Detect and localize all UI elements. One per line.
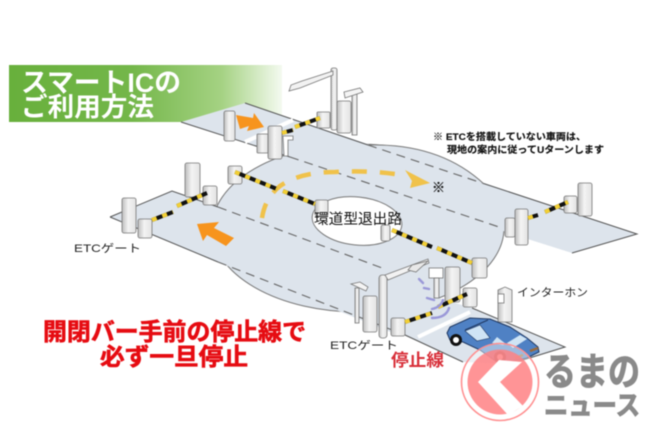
gate: upper lamp and sign [289, 68, 363, 135]
note: ETC not installed: ※ ETCを搭載していない車両は、 [433, 131, 586, 143]
label: ETC gate left: ETCゲート [74, 242, 141, 255]
gate: lower with lamp [351, 259, 477, 338]
main red message [43, 319, 306, 371]
note mark: ※ [432, 180, 445, 195]
icon: radio waves [419, 279, 449, 318]
label: ETC gate lower: ETCゲート [330, 339, 398, 352]
note: ETC not installed [433, 131, 604, 156]
label: loop exit road: 環道型退出路 [314, 211, 403, 228]
title banner: ご利用方法 [21, 92, 154, 122]
central island [310, 192, 404, 250]
logo: watermark [462, 344, 640, 421]
gate: left lower [122, 163, 217, 238]
arrow: upper lane orange [236, 113, 264, 131]
main red message: 必ず一旦停止 [100, 344, 248, 371]
stop line [418, 312, 470, 337]
main red message: 開閉バー手前の停止線で [43, 319, 306, 346]
note: ETC not installed: 現地の案内に従ってUターンします [447, 144, 604, 156]
icon: blue car [447, 318, 539, 363]
title banner: スマートICの [21, 68, 181, 98]
road surface: roundabout and lanes [110, 103, 637, 364]
gate: upper left [224, 111, 330, 159]
title banner [9, 65, 282, 122]
arrow: yellow dashed route [262, 170, 430, 218]
label: intercom: インターホン [517, 286, 588, 299]
arrow: lower lane orange [197, 222, 234, 246]
logo: watermark: ニュース [544, 391, 640, 421]
gate: centre bars [228, 166, 487, 278]
label: stop line: 停止線 [391, 350, 444, 370]
gate: right [505, 183, 592, 245]
icon: intercom [498, 287, 512, 322]
